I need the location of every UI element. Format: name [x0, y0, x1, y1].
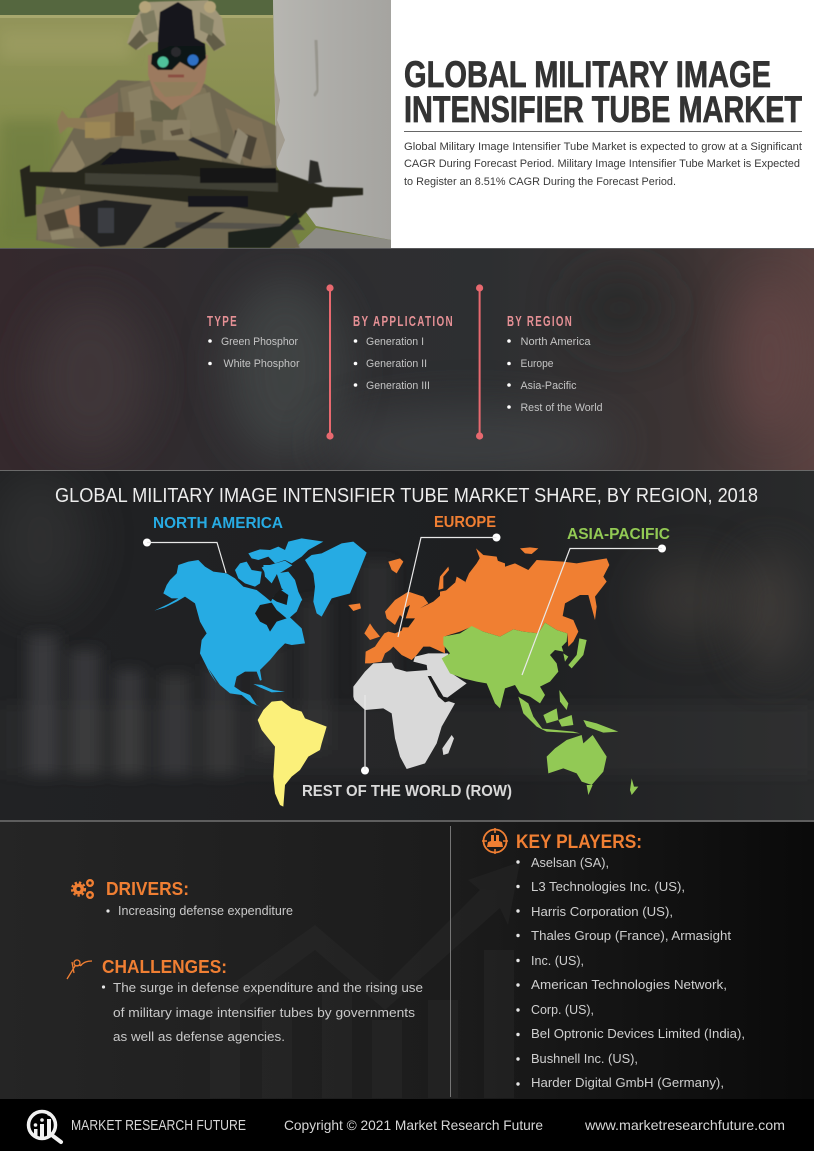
icon: challenge climber — [67, 960, 92, 979]
panel: regional market share map — [0, 470, 814, 821]
column: by region: BY REGION — [507, 313, 573, 330]
label: Asia-Pacific callout: ASIA-PACIFIC — [567, 526, 670, 543]
key players list: Corp. (US), — [531, 1003, 594, 1017]
panel: drivers, challenges and key players — [0, 820, 814, 1099]
key players list: Harris Corporation (US), — [531, 905, 673, 919]
label: Europe callout: EUROPE — [434, 514, 496, 531]
challenge text: The surge in defense expenditure and the rising use — [113, 981, 423, 995]
sight scope — [57, 110, 135, 140]
wall — [273, 0, 391, 240]
world map — [154, 538, 638, 807]
title — [404, 54, 802, 130]
region: North and South America — [154, 538, 367, 807]
column: by application: Generation III — [366, 380, 430, 392]
glove — [78, 200, 152, 247]
label: Europe callout — [398, 514, 500, 637]
map cut-outs: Red Sea — [428, 676, 455, 702]
icon: key players target — [482, 828, 508, 854]
label: North America callout — [143, 515, 283, 573]
camouflage patches — [85, 92, 118, 128]
key players list: American Technologies Network, — [531, 978, 727, 992]
NVG mount — [158, 2, 205, 52]
column: type: TYPE — [207, 313, 238, 330]
column: type: White Phosphor — [224, 358, 300, 370]
column: type: Green Phosphor — [221, 336, 298, 348]
key players list: Inc. (US), — [531, 954, 584, 968]
key players list: Bel Optronic Devices Limited (India), — [531, 1027, 745, 1041]
copyright: Copyright © 2021 Market Research Future — [284, 1117, 543, 1133]
torso — [36, 80, 300, 248]
key players list: Aselsan (SA), — [531, 856, 609, 870]
background arrow watermark — [210, 862, 520, 1098]
divider with end dots — [476, 284, 483, 440]
helmet — [127, 0, 226, 51]
bipod — [175, 222, 305, 230]
region: eastern Russia — [440, 548, 609, 647]
neck and face — [148, 55, 208, 110]
heading: KEY PLAYERS: — [516, 832, 642, 853]
label: Rest of the World callout — [302, 695, 512, 800]
icon: gears — [72, 880, 93, 898]
panel: header title area — [391, 0, 814, 248]
region: Africa and Middle East — [353, 653, 467, 769]
map cut-outs: Baltic Sea — [402, 605, 415, 627]
region: South America — [258, 701, 327, 807]
brand name: MARKET RESEARCH FUTURE — [71, 1118, 246, 1134]
key players list: Harder Digital GmbH (Germany), — [531, 1076, 724, 1090]
key players list: L3 Technologies Inc. (US), — [531, 880, 685, 894]
key players list: Bushnell Inc. (US), — [531, 1052, 638, 1066]
title rule — [404, 131, 802, 132]
challenge text: of military image intensifier tubes by governments — [113, 1006, 415, 1020]
key players list: Thales Group (France), Armasight — [531, 929, 732, 943]
label: Rest of the World callout: REST OF THE WORLD (ROW) — [302, 783, 512, 800]
column: by application: Generation I — [366, 336, 424, 348]
region: Asia — [440, 547, 638, 795]
region: Asia-Pacific — [442, 623, 638, 795]
driver item: Increasing defense expenditure — [118, 904, 293, 918]
challenges block — [67, 957, 423, 1044]
column: by region: Asia-Pacific — [520, 380, 577, 392]
region: Europe and Africa — [353, 555, 505, 769]
NVG lenses — [156, 54, 170, 70]
heading: CHALLENGES: — [102, 957, 227, 977]
intro paragraph — [404, 141, 802, 188]
region: North America — [154, 538, 367, 707]
label: Asia-Pacific callout — [522, 526, 670, 675]
photo: soldier with night vision and machine gun — [0, 0, 391, 248]
heading: DRIVERS: — [106, 879, 189, 899]
column: by region — [507, 313, 602, 414]
vertical divider — [450, 826, 451, 1097]
intro paragraph: CAGR During Forecast Period. Military Image Intensifier Tube Market is Expected — [404, 158, 800, 170]
machine gun — [20, 152, 363, 218]
key players list — [516, 856, 745, 1090]
intro paragraph: Global Military Image Intensifier Tube Market is expected to grow at a Significant — [404, 141, 802, 153]
column: by application — [353, 313, 454, 392]
column: by region: North America — [520, 336, 591, 348]
divider with end dots — [326, 284, 334, 440]
intro paragraph: to Register an 8.51% CAGR During the Forecast Period. — [404, 176, 676, 188]
icon: Market Research Future logo — [28, 1112, 61, 1142]
drivers block — [72, 879, 293, 918]
column: by application: BY APPLICATION — [353, 313, 454, 330]
region: Europe — [364, 555, 505, 663]
key players block — [482, 828, 745, 1090]
panel: market segmentation — [0, 248, 814, 478]
challenge text — [102, 981, 423, 1044]
challenge text: as well as defense agencies. — [113, 1030, 285, 1044]
region: Iceland — [348, 603, 361, 611]
column: by region: Rest of the World — [520, 402, 602, 414]
map cut-outs: Hudson Bay — [255, 589, 288, 632]
footer — [0, 1099, 814, 1151]
column: by application: Generation II — [366, 358, 427, 370]
website: www.marketresearchfuture.com — [584, 1117, 785, 1133]
label: North America callout: NORTH AMERICA — [153, 515, 283, 532]
column: by region: Europe — [520, 358, 554, 370]
column: type — [207, 313, 300, 370]
